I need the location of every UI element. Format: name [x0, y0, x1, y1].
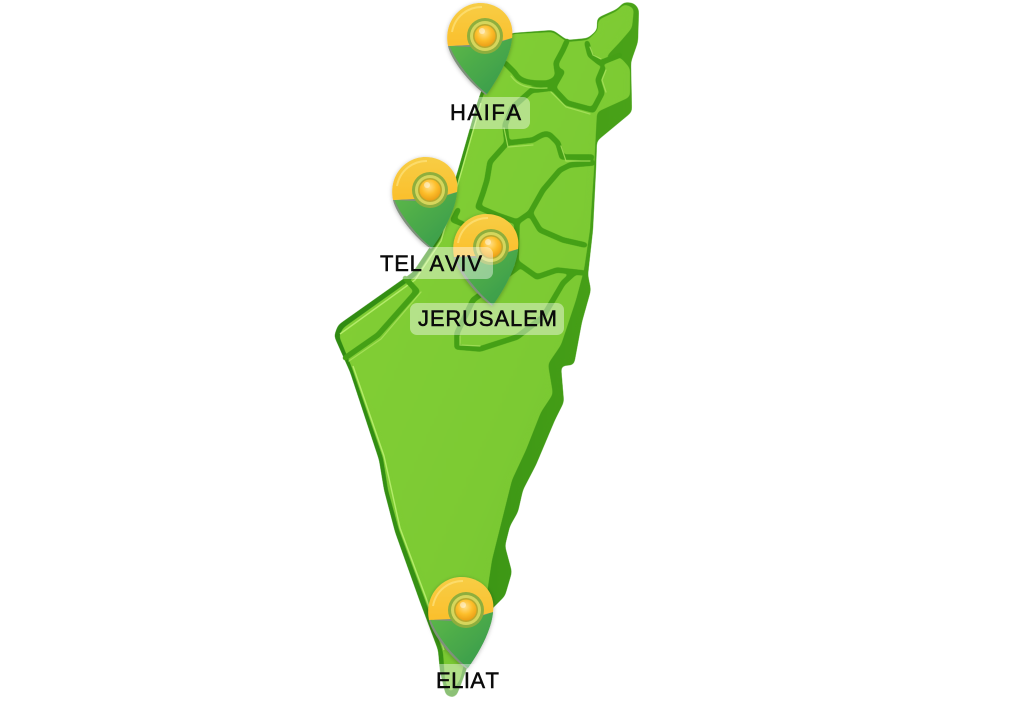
label: Haifa	[443, 97, 530, 129]
label: Eliat	[428, 664, 507, 696]
label: Tel Aviv: TEL AVIV	[380, 251, 482, 276]
map of Israel	[334, 2, 639, 697]
northwest shore highlight	[340, 103, 481, 650]
pin: Haifa	[447, 3, 512, 95]
label: Eliat: ELIAT	[436, 668, 499, 693]
pin: Tel Aviv	[392, 157, 457, 249]
pin: Jerusalem	[453, 214, 518, 306]
map extrusion silhouette	[334, 2, 639, 697]
map top face	[339, 4, 634, 694]
label: Haifa: HAIFA	[450, 100, 521, 125]
label: Tel Aviv	[372, 247, 493, 279]
district borders	[345, 41, 620, 358]
pin: Eliat	[428, 577, 493, 669]
border highlights	[349, 47, 606, 361]
label: Jerusalem: JERUSALEM	[418, 306, 557, 331]
